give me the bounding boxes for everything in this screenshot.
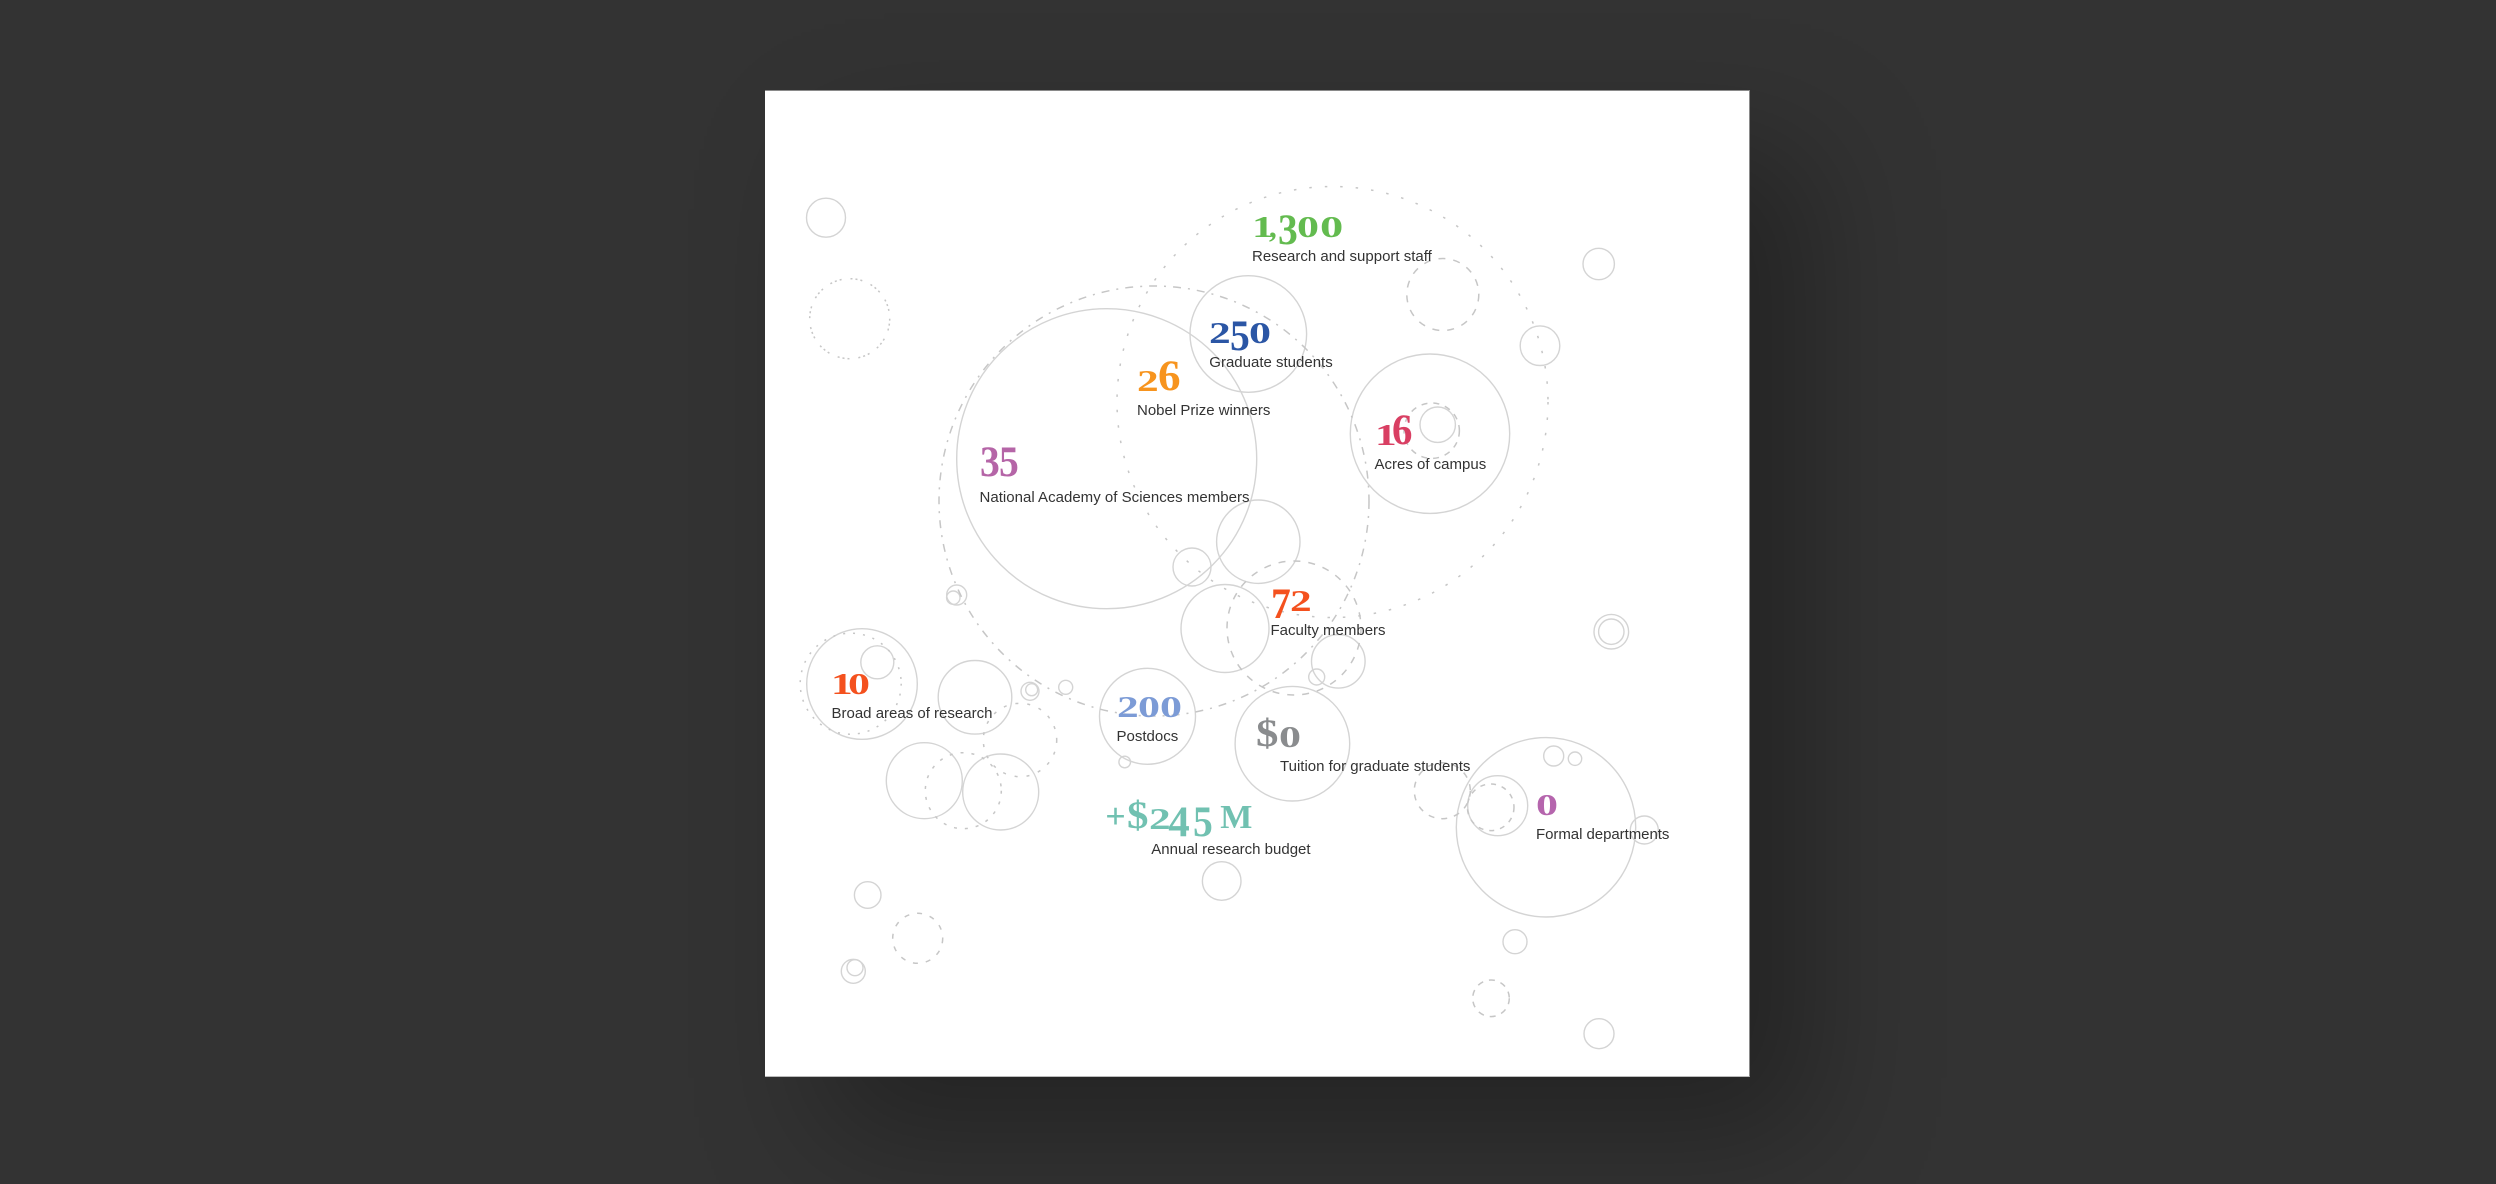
label: Formal departments	[1536, 826, 1669, 843]
number: 0	[1320, 209, 1343, 244]
stat: 200 postdocs	[1116, 689, 1182, 745]
stat: 10 broad areas of research	[830, 666, 992, 722]
dashed and dotted circles	[800, 186, 1548, 1017]
circle: Graduate students	[1190, 276, 1307, 392]
number: 3	[1278, 207, 1298, 254]
number	[980, 439, 1018, 486]
number: 3	[980, 439, 999, 486]
stat: 250 graduate students	[1209, 313, 1333, 371]
number: 5	[998, 439, 1018, 486]
circle: Tuition for graduate students	[1235, 686, 1350, 801]
number: 6	[1158, 353, 1181, 400]
number: 0	[1138, 689, 1160, 724]
number: 0	[1297, 209, 1319, 244]
number: 2	[1149, 801, 1171, 836]
label: National Academy of Sciences members	[980, 489, 1250, 506]
number: 1	[830, 666, 852, 701]
number: 0	[848, 666, 870, 701]
label: Graduate students	[1209, 354, 1333, 371]
number: M	[1220, 799, 1252, 836]
number: 6	[1392, 407, 1412, 454]
number: 5	[1230, 313, 1250, 360]
number: 0	[1278, 719, 1301, 754]
number: 0	[1536, 787, 1558, 822]
circle: Postdocs	[1100, 668, 1196, 764]
label: Acres of campus	[1374, 456, 1486, 473]
number: $	[1256, 712, 1278, 755]
label: Postdocs	[1116, 728, 1178, 745]
number: 0	[1160, 689, 1182, 724]
stat: $0 tuition for graduate students	[1256, 712, 1470, 775]
label: Faculty members	[1270, 622, 1386, 639]
stat: 16 acres of campus	[1374, 407, 1486, 473]
number: 4	[1168, 799, 1190, 846]
label: Annual research budget	[1151, 841, 1311, 858]
number: 7	[1270, 581, 1290, 628]
number	[1252, 207, 1343, 254]
number: 1	[1252, 209, 1274, 244]
stat: +$245 M annual research budget	[1105, 794, 1311, 858]
number: +	[1105, 796, 1126, 836]
number: 2	[1290, 583, 1311, 618]
label: Research and support staff	[1252, 248, 1432, 265]
stat: 0 formal departments	[1536, 787, 1669, 843]
number: $	[1127, 794, 1149, 837]
label: Broad areas of research	[832, 705, 992, 722]
number: 1	[1374, 417, 1396, 452]
stat: 35 National Academy of Sciences members	[980, 439, 1250, 506]
number: 5	[1193, 799, 1213, 846]
label: Tuition for graduate students	[1280, 758, 1470, 775]
circle: Formal departments	[1456, 738, 1636, 917]
number: ,	[1269, 209, 1277, 244]
label: Nobel Prize winners	[1137, 402, 1270, 419]
stat: 26 Nobel Prize winners	[1137, 353, 1270, 419]
circle: National Academy of Sciences members	[957, 309, 1257, 609]
number	[1116, 689, 1182, 724]
circle: Broad areas of research	[807, 629, 917, 739]
number	[1256, 712, 1301, 755]
stat: 72 faculty members	[1270, 581, 1386, 639]
circle: Acres of campus	[1350, 354, 1510, 513]
number	[1209, 313, 1271, 360]
number: 2	[1209, 315, 1231, 350]
number: 2	[1116, 689, 1138, 724]
stat: 1,300 research and support staff	[1252, 207, 1432, 265]
number: 0	[1249, 315, 1271, 350]
number	[830, 666, 870, 701]
number	[1374, 407, 1412, 454]
number	[1270, 581, 1311, 628]
white card panel	[765, 90, 1750, 1077]
number	[1137, 353, 1181, 400]
other solid circles	[806, 198, 1658, 1049]
number: 2	[1137, 363, 1159, 398]
number	[1105, 794, 1252, 846]
